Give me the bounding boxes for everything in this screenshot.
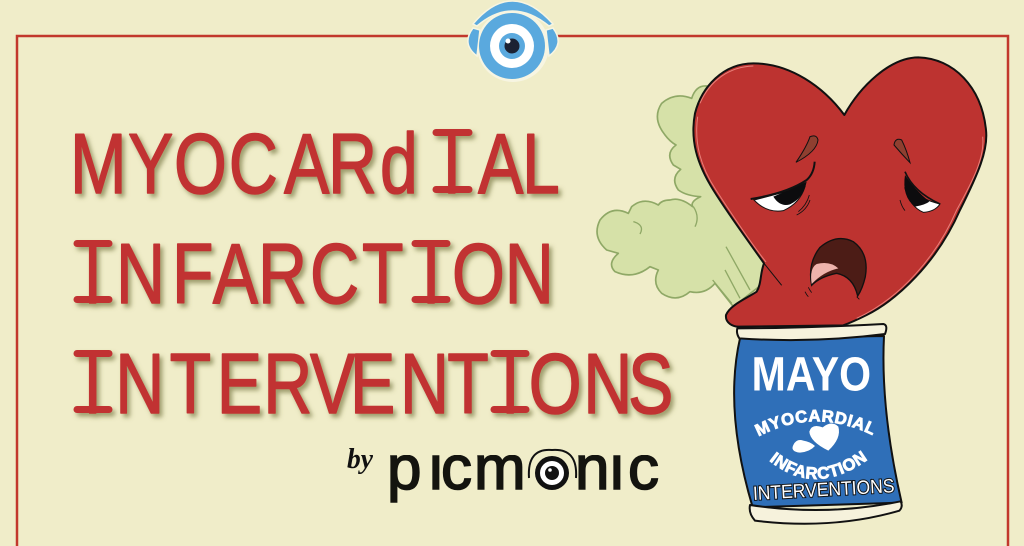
picmonic wordmark: picmonic	[387, 434, 659, 503]
MAYO label: MAYO	[752, 348, 871, 401]
title: INFARCTION	[83, 227, 554, 322]
title	[70, 117, 673, 432]
right brow crease	[894, 139, 910, 163]
can	[733, 323, 903, 525]
mascot: sick heart in can	[596, 56, 988, 525]
icon: blue eye headphones logo	[468, 1, 558, 82]
left eye	[751, 162, 815, 211]
MYOCARDIAL arc label: MYOCARDIAL	[754, 410, 874, 436]
left brow crease	[796, 136, 818, 162]
title: INTERVENTIONS	[83, 337, 673, 432]
right eye	[904, 172, 940, 212]
byline: by picmonic	[347, 448, 658, 503]
by: by	[347, 443, 373, 475]
INFARCTION arc label: INFARCTION	[769, 450, 868, 480]
can bottom rim	[750, 501, 902, 524]
mouth	[811, 239, 866, 296]
icon: picmonic eye	[529, 450, 576, 490]
INTERVENTIONS label: INTERVENTIONS	[752, 476, 895, 505]
green gas cloud	[597, 86, 767, 307]
icon: small heart and puff	[792, 423, 839, 453]
can body	[734, 336, 902, 507]
can top rim	[737, 324, 886, 340]
red heart	[693, 57, 986, 327]
title: MYOCARdIAL	[70, 117, 560, 212]
